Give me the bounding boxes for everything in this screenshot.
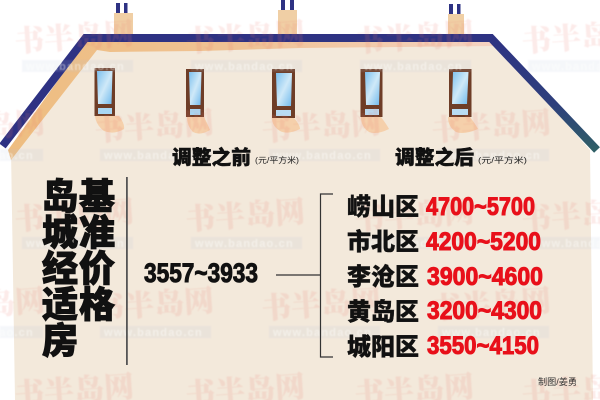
vertical title: 价 (79, 248, 115, 289)
window 1 (94, 68, 124, 133)
watermarks: 书半岛网 (260, 276, 382, 328)
vertical title: 基 (79, 176, 115, 217)
row: Laoshan: 4700~5700 (426, 193, 535, 221)
vertical title: 城 (42, 212, 78, 253)
watermarks: www.bandao.cn (25, 61, 125, 73)
row: Laoshan (347, 193, 535, 221)
heading: after adjustment (395, 146, 527, 169)
watermarks: 书半岛网 (353, 187, 475, 239)
watermarks: www.bandao.cn (441, 150, 541, 162)
district price list (347, 193, 543, 361)
row: Laoshan: 崂山区 (347, 194, 419, 221)
roof underside band (8, 40, 495, 160)
row: Shibei: 4200~5200 (426, 228, 541, 256)
heading: before adjustment (172, 146, 299, 169)
window 4 (360, 69, 389, 133)
heading: after adjustment: 调整之后 (395, 146, 474, 169)
watermarks: 书半岛网 (93, 98, 215, 150)
connector bracket (276, 194, 333, 357)
watermarks: www.bandao.cn (272, 150, 372, 162)
vertical title: 格 (79, 284, 115, 325)
row: Huangdao (347, 297, 542, 326)
watermarks: 书半岛网 (93, 276, 215, 328)
watermarks: 书半岛网 (430, 98, 552, 150)
watermarks: www.bandao.cn (363, 238, 463, 250)
row: Licang: 李沧区 (347, 263, 419, 291)
watermarks: www.bandao.cn (194, 61, 294, 73)
heading: before adjustment: 调整之前 (172, 146, 251, 169)
row: Shibei (347, 228, 541, 256)
vertical title: 房 (42, 320, 78, 361)
row: Chengyang: 城阳区 (347, 333, 419, 361)
row: Chengyang (347, 332, 539, 361)
watermarks: 书半岛网 (13, 187, 135, 239)
row: Licang: 3900~4600 (427, 263, 543, 291)
vertical title: 适 (42, 284, 78, 325)
credit: 制图/姜勇 (538, 376, 577, 387)
roof outline (2, 38, 597, 150)
watermarks: www.bandao.cn (103, 327, 203, 339)
watermarks: 书半岛网 (430, 276, 552, 328)
watermarks: 书半岛网 (13, 9, 135, 61)
watermarks: 书半岛网 (260, 98, 382, 150)
row: Licang (347, 263, 543, 291)
watermarks: www.bandao.cn (441, 327, 541, 339)
watermarks: www.bandao.cn (25, 238, 125, 250)
heading: after adjustment: (元/平方米) (478, 155, 527, 165)
watermarks: 书半岛网 (184, 187, 306, 239)
window 2 (186, 69, 210, 134)
watermarks: 书半岛网 (184, 9, 306, 61)
chimneys (114, 0, 464, 36)
row: Huangdao: 黄岛区 (347, 299, 419, 326)
row: Huangdao: 3200~4300 (427, 297, 542, 325)
window 5 (448, 69, 478, 133)
row: Shibei: 市北区 (347, 228, 419, 256)
watermarks: www.bandao.cn (194, 238, 294, 250)
window 3 (272, 69, 300, 133)
title divider line (126, 177, 128, 365)
old price range: 3557~3933 (144, 258, 258, 288)
watermarks: 书半岛网 (353, 9, 475, 61)
watermarks: www.bandao.cn (363, 61, 463, 73)
vertical title (42, 176, 115, 361)
windows (94, 68, 478, 134)
watermarks: www.bandao.cn (103, 150, 203, 162)
row: Chengyang: 3550~4150 (427, 332, 539, 360)
heading: before adjustment: (元/平方米) (255, 155, 299, 165)
vertical title: 岛 (42, 176, 78, 217)
watermarks: www.bandao.cn (272, 327, 372, 339)
vertical title: 准 (79, 212, 115, 253)
vertical title: 经 (42, 248, 78, 289)
